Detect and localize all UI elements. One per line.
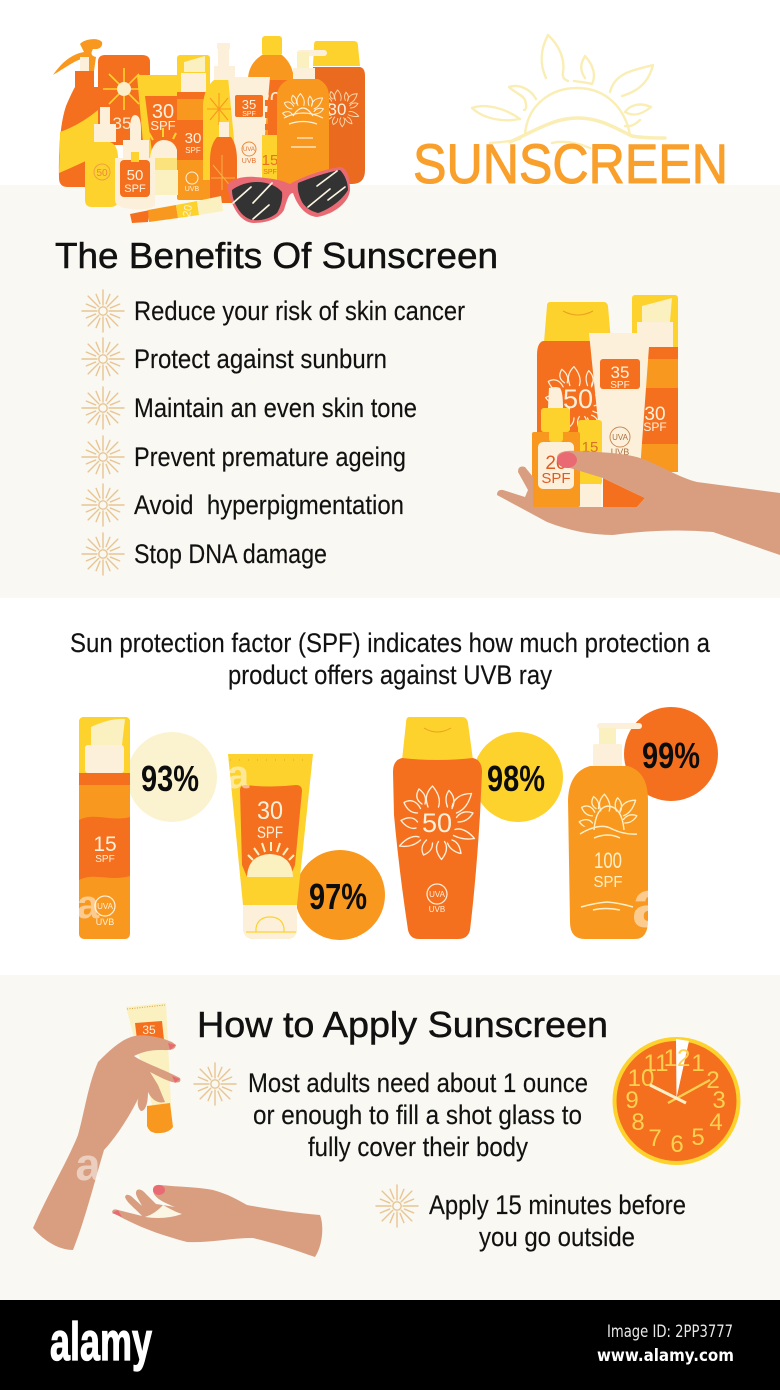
icon: clock showing 15 minutes: 5	[691, 1124, 705, 1151]
cream tube SPF 35: 35	[611, 363, 629, 382]
yellow lotion SPF 50: 50	[96, 168, 108, 179]
explanation: SPF: product offers against UVB ray	[228, 660, 553, 690]
dropper SPF 20: 20	[545, 453, 567, 474]
circle: 99%	[624, 707, 718, 801]
tall pump SPF 30	[632, 295, 678, 472]
product: SPF 15: UVB	[96, 917, 114, 927]
benefits list	[82, 290, 465, 575]
icon: clock showing 15 minutes: 9	[625, 1087, 639, 1114]
icon: clock showing 15 minutes: 4	[709, 1109, 723, 1136]
icon: sunburst	[82, 436, 124, 478]
icon: sunburst	[194, 1063, 236, 1105]
orange cap	[603, 478, 645, 507]
yellow tube SPF 30: 30	[152, 101, 174, 123]
circle: 99%: 99%	[642, 735, 700, 776]
lotion	[145, 1205, 182, 1218]
tube	[126, 1003, 173, 1133]
product: SPF 15: UVA	[97, 902, 114, 911]
icon: sunburst	[82, 338, 124, 380]
product: SPF 30 tube: 30	[257, 797, 283, 825]
icon: clock showing 15 minutes: 11	[644, 1050, 668, 1077]
circle: 93%	[127, 732, 217, 822]
tube: 35	[142, 1023, 156, 1037]
instruction text	[429, 1190, 686, 1252]
footer bar	[0, 1300, 780, 1390]
benefit text: Stop DNA damage	[134, 539, 327, 569]
lower hand	[112, 1185, 322, 1257]
small orange spray	[210, 122, 237, 203]
illustration: hand holding sunscreen products	[497, 295, 780, 555]
icon: sunburst	[82, 387, 124, 429]
tall pump SPF 30: SPF	[643, 420, 667, 434]
product: SPF 100 pump	[568, 723, 648, 939]
product: SPF 50 bottle: UVA	[429, 890, 446, 899]
yellow tube SPF 30: SPF	[150, 118, 176, 133]
tall pump SPF 30: UVB	[185, 186, 200, 193]
product: SPF 50 bottle: 50	[422, 808, 452, 838]
lip balm tube: 20	[181, 204, 195, 218]
circle: 93%: 93%	[141, 758, 199, 799]
tall pump SPF 30: 30	[185, 130, 201, 147]
instruction text: you go outside	[479, 1222, 635, 1252]
cream tube SPF 35: 15	[262, 152, 278, 169]
yellow lotion SPF 50	[85, 107, 118, 207]
dropper SPF 50: SPF	[124, 183, 146, 195]
product: SPF 15: a	[77, 883, 100, 927]
icon: clock showing 15 minutes: 2	[706, 1067, 720, 1094]
orange bottle SPF 30	[313, 41, 365, 184]
orange pump bottle	[277, 50, 329, 190]
SPF comparison chart	[77, 707, 718, 942]
circle: 97%	[295, 850, 385, 940]
image id: Image ID: 2PP3777	[607, 1322, 733, 1342]
cream tube SPF 35: SPF	[242, 111, 256, 118]
wordmark: SUNSCREEN	[413, 132, 728, 195]
spray bottle	[53, 39, 102, 187]
product: SPF 15: SPF	[95, 854, 115, 865]
icon: clock showing 15 minutes: 10	[628, 1065, 654, 1092]
product: SPF 30 tube	[227, 753, 313, 939]
product: SPF 30 tube: SPF	[257, 823, 283, 842]
alamy logo: alamy	[50, 1312, 152, 1372]
icon: clock showing 15 minutes: 12	[664, 1045, 690, 1072]
cream tube SPF 35: UVA	[243, 147, 255, 153]
sunglasses	[227, 167, 350, 223]
yellow tube SPF 30	[137, 75, 180, 195]
benefit text: Maintain an even skin tone	[134, 393, 417, 423]
icon: clock showing 15 minutes: 7	[648, 1125, 662, 1152]
cream tube SPF 35: UVA	[612, 433, 629, 442]
instruction text: Apply 15 minutes before	[429, 1190, 686, 1220]
icon: clock showing 15 minutes: 6	[670, 1131, 684, 1158]
icon: clock showing 15 minutes: 3	[712, 1087, 726, 1114]
heading: benefits: The Benefits Of Sunscreen	[55, 235, 498, 276]
yellow bottle SPF 50	[537, 302, 612, 500]
benefit text: Prevent premature ageing	[134, 442, 406, 472]
instruction: timing	[376, 1185, 686, 1252]
orange bottle SPF 20	[248, 36, 294, 175]
stick SPF 15: 15	[582, 439, 598, 456]
product: SPF 30 tube: a	[227, 753, 250, 797]
circle: 97%: 97%	[309, 876, 367, 917]
product: SPF 15: 15	[93, 833, 117, 856]
orange bottle SPF 20: 20	[259, 89, 281, 111]
cream tube SPF 35: 35	[242, 97, 256, 112]
cream tube SPF 35: SPF	[610, 380, 630, 391]
icon: pale sun	[472, 35, 665, 148]
product: SPF 50 bottle: UVB	[429, 905, 445, 914]
icon: clock showing 15 minutes	[614, 1039, 738, 1163]
explanation: SPF	[70, 628, 710, 690]
icon: sunburst	[376, 1185, 418, 1227]
instruction text	[248, 1068, 588, 1162]
dropper SPF 20	[532, 387, 580, 507]
stick SPF 15	[578, 420, 602, 507]
site url: www.alamy.com	[597, 1346, 734, 1366]
illustration: group of sunscreen products	[53, 36, 365, 223]
instruction text: fully cover their body	[308, 1132, 528, 1162]
cream tube SPF 35	[589, 333, 650, 470]
lip balm tube	[130, 196, 223, 223]
nails	[112, 1043, 180, 1217]
tall pump SPF 30: 30	[644, 404, 666, 425]
benefit text: Reduce your risk of skin cancer	[134, 296, 465, 326]
circle: 98%	[473, 732, 563, 822]
heading: how to apply: How to Apply Sunscreen	[197, 1004, 608, 1045]
cream tube SPF 35	[228, 77, 280, 185]
illustration: hand squeezing tube	[33, 1003, 322, 1257]
logo: sun outline and SUNSCREEN wordmark	[413, 35, 728, 195]
icon: sunburst	[82, 484, 124, 526]
product: SPF 100 pump: SPF	[594, 874, 623, 891]
cream tube SPF 35: SPF	[263, 169, 277, 176]
orange box SPF 35	[98, 55, 150, 145]
arm and hand	[33, 1035, 180, 1250]
product: SPF 15	[77, 717, 130, 939]
instruction: amount	[194, 1063, 588, 1162]
icon: sunburst	[82, 290, 124, 332]
yellow bottle SPF 50: 50	[563, 384, 593, 414]
product: SPF 50 bottle	[393, 717, 482, 939]
icon: clock showing 15 minutes: 1	[691, 1050, 705, 1077]
circle: 98%: 98%	[487, 758, 545, 799]
illustration: hand squeezing tube: a	[75, 1139, 101, 1190]
tall pump SPF 30: SPF	[185, 146, 201, 155]
tall pump SPF 30	[177, 55, 210, 200]
orange box SPF 35: 35	[113, 114, 131, 133]
dropper SPF 50	[115, 115, 178, 210]
product: SPF 100 pump: a	[632, 866, 671, 942]
dropper SPF 20: SPF	[541, 470, 571, 487]
benefit text: Protect against sunburn	[134, 344, 387, 374]
explanation: SPF: Sun protection factor (SPF) indicates how much protection a	[70, 628, 710, 658]
instruction text: or enough to fill a shot glass to	[253, 1100, 582, 1130]
icon: sunburst	[82, 533, 124, 575]
benefit text: Avoid hyperpigmentation	[134, 490, 404, 520]
fingernail	[557, 452, 577, 468]
cream tube SPF 35: UVB	[242, 158, 257, 165]
thin yellow spray	[203, 43, 236, 180]
orange bottle SPF 30: 30	[328, 100, 346, 119]
product: SPF 100 pump: 100	[594, 848, 622, 873]
cream tube SPF 35: UVB	[611, 447, 629, 457]
hand	[497, 451, 780, 555]
dropper SPF 50: 50	[127, 167, 143, 184]
icon: clock showing 15 minutes: 8	[631, 1109, 645, 1136]
instruction text: Most adults need about 1 ounce	[248, 1068, 588, 1098]
